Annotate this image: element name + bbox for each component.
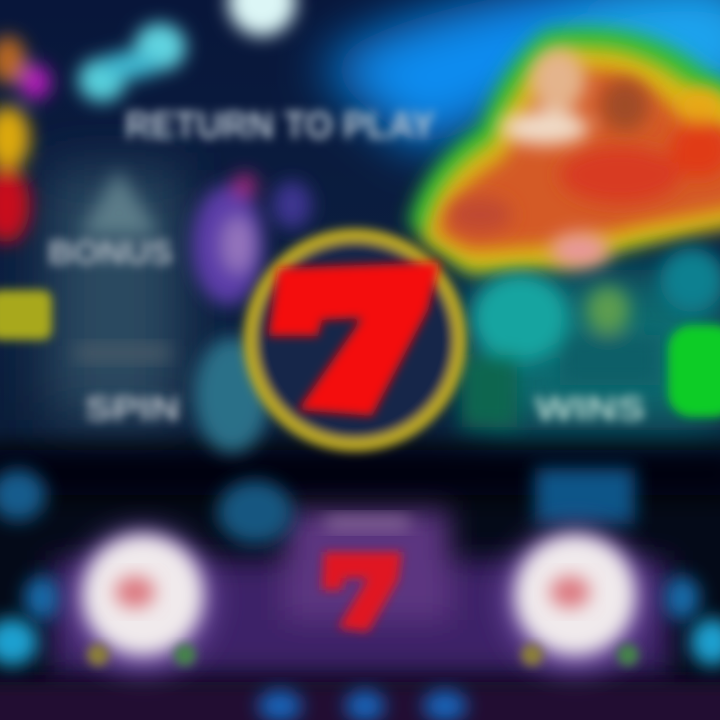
bottom maroon strip <box>0 682 720 720</box>
icon: bright green shape <box>668 325 720 417</box>
green outline <box>408 27 720 270</box>
icon: moon top <box>228 0 296 36</box>
icon: right chip <box>503 528 647 672</box>
icon: gray shape <box>80 170 160 235</box>
stat: lower left label <box>75 345 180 428</box>
faint text <box>75 345 170 361</box>
seven <box>268 262 440 416</box>
dark band <box>0 450 720 495</box>
icon: cyan blob <box>78 23 186 102</box>
character illustration with rainbow outline <box>408 27 720 272</box>
glow <box>71 528 215 672</box>
teal wash right <box>470 270 720 430</box>
title: RETURN TO PLAY <box>125 105 435 147</box>
trim <box>521 644 639 666</box>
trim <box>87 644 196 666</box>
icon: teal figure <box>194 337 270 453</box>
sky glow top right <box>320 0 720 150</box>
orange body <box>438 70 720 250</box>
callout: left yellow bar <box>0 290 52 340</box>
caption above seven <box>325 516 410 530</box>
stat: lower right label: WINS <box>535 390 645 428</box>
icon: cyan corners <box>0 618 720 666</box>
face highlight <box>501 48 649 268</box>
bottom nav dots <box>258 690 467 720</box>
value: SPIN <box>85 390 180 428</box>
icon: purple figure <box>192 173 312 305</box>
steel column left <box>50 170 180 420</box>
panel: bottom purple stage <box>50 510 670 675</box>
icon: teal blob right <box>462 248 720 427</box>
centre <box>550 576 590 608</box>
disc <box>250 235 460 445</box>
icon: small red seven <box>322 552 402 632</box>
glow <box>503 528 647 672</box>
centre <box>115 576 155 608</box>
stat: left text block <box>48 170 173 272</box>
disc <box>83 535 203 655</box>
red patches <box>448 89 720 233</box>
blue accents <box>0 468 700 620</box>
yellow rim <box>422 47 720 272</box>
icon: lucky seven ring <box>250 235 460 445</box>
icon: left slot reel <box>0 36 51 243</box>
disc <box>515 535 635 655</box>
icon: left chip <box>71 528 215 672</box>
label: BONUS <box>48 234 173 272</box>
